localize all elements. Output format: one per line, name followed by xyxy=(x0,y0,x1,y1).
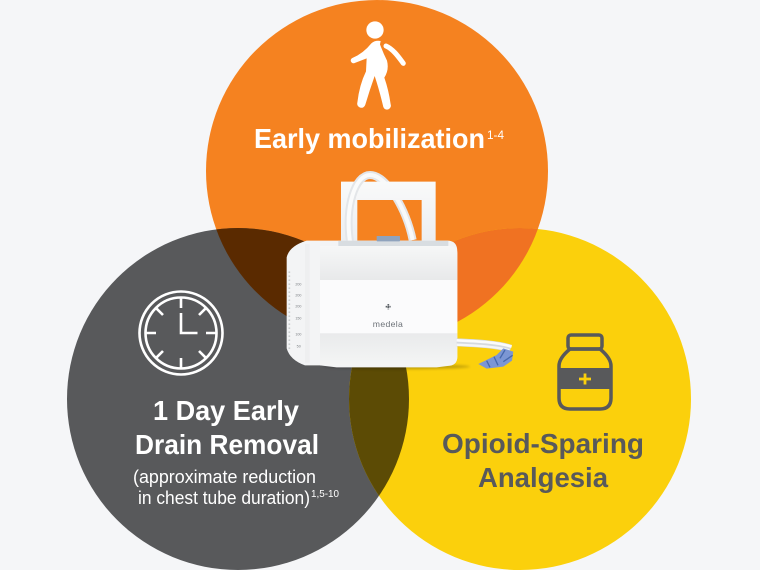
device logo text: medela xyxy=(373,319,403,329)
device side tube xyxy=(457,342,511,349)
text block: chest tube duration note: (approximate reduction xyxy=(133,467,316,487)
overlap: gray and yellow xyxy=(349,367,409,496)
heading: 1 day early drain removal xyxy=(135,395,319,460)
icon: walking person xyxy=(351,21,403,110)
device scale markings: 150 xyxy=(295,317,301,321)
device scale markings: 100 xyxy=(295,333,301,337)
heading: 1 day early drain removal: 1 Day Early xyxy=(153,395,299,426)
panel: early mobilization circle xyxy=(206,0,548,342)
icon: medicine bottle xyxy=(559,335,611,409)
text block: chest tube duration note: in chest tube duration) xyxy=(138,488,310,508)
device seam xyxy=(305,244,310,363)
device logo mark xyxy=(386,304,391,309)
text block: chest tube duration note: 1,5-10 xyxy=(311,488,339,500)
heading: early mobilization: Early mobilization xyxy=(254,123,485,154)
heading: opioid-sparing analgesia: Analgesia xyxy=(478,462,608,493)
icon: clock xyxy=(140,292,222,374)
device shadow xyxy=(323,364,470,369)
panel: drain removal circle xyxy=(67,228,409,570)
device body xyxy=(287,241,457,367)
device scale markings: 200 xyxy=(295,283,301,287)
heading: opioid-sparing analgesia xyxy=(442,428,644,493)
heading: 1 day early drain removal: Drain Removal xyxy=(135,429,319,460)
device scale markings: 50 xyxy=(297,345,301,349)
device tubing, front xyxy=(349,175,370,242)
device scale markings: 200 xyxy=(295,304,301,308)
heading: early mobilization: 1-4 xyxy=(487,128,504,142)
panel: opioid-sparing circle xyxy=(349,228,691,570)
device scale markings: 200 xyxy=(295,294,301,298)
device: medela drainage pump xyxy=(287,175,513,369)
heading: opioid-sparing analgesia: Opioid-Sparing xyxy=(442,428,644,459)
overlap: orange and yellow xyxy=(452,228,538,322)
device scale markings xyxy=(295,283,301,349)
device blue connector xyxy=(478,348,513,369)
device handle xyxy=(341,182,436,242)
text block: chest tube duration note xyxy=(133,467,339,508)
overlap: orange and gray xyxy=(216,228,304,316)
device tubing, rear xyxy=(370,175,413,240)
device top edge xyxy=(338,241,448,246)
